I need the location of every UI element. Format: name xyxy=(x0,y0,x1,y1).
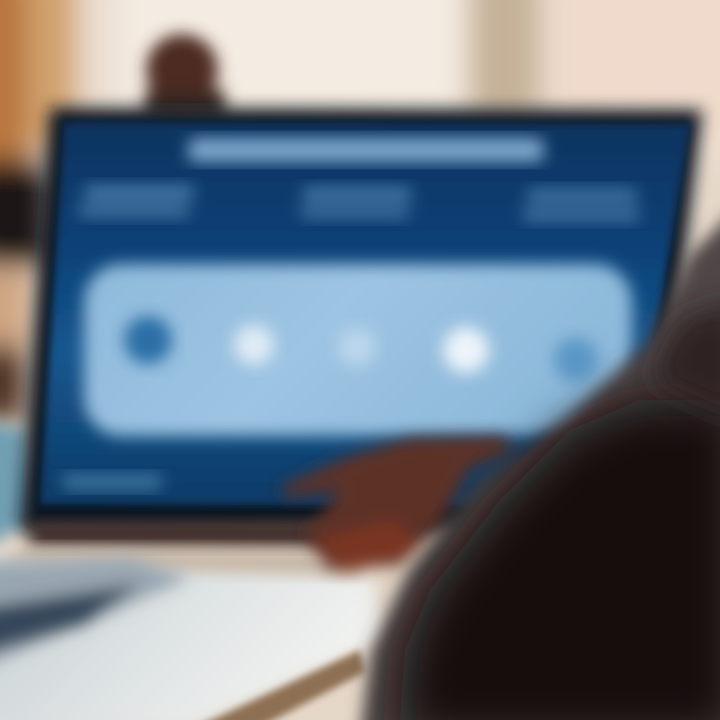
footer text xyxy=(62,474,162,490)
shoulder in foreground xyxy=(360,205,720,720)
monitor screen xyxy=(40,122,690,506)
icon: step 5 xyxy=(554,338,598,382)
desk xyxy=(0,522,385,720)
light blue panel xyxy=(84,264,632,436)
icon: step 2 xyxy=(234,325,274,365)
title bar xyxy=(188,138,544,162)
column heading: right xyxy=(522,190,640,220)
icon: step 1 xyxy=(124,316,172,364)
hand pointing xyxy=(278,436,515,572)
laptop xyxy=(0,558,190,668)
laptop screen at far left xyxy=(0,420,34,550)
shoulder rim xyxy=(360,205,720,720)
shoulder body xyxy=(398,400,720,720)
column heading: centre xyxy=(300,188,412,217)
column heading: left xyxy=(78,186,194,216)
shoulder upper shade xyxy=(650,300,720,420)
icon: step 4 xyxy=(443,327,489,373)
monitor frame shadow xyxy=(20,108,702,532)
person in background xyxy=(145,34,225,118)
icon: step 3 xyxy=(338,328,376,366)
